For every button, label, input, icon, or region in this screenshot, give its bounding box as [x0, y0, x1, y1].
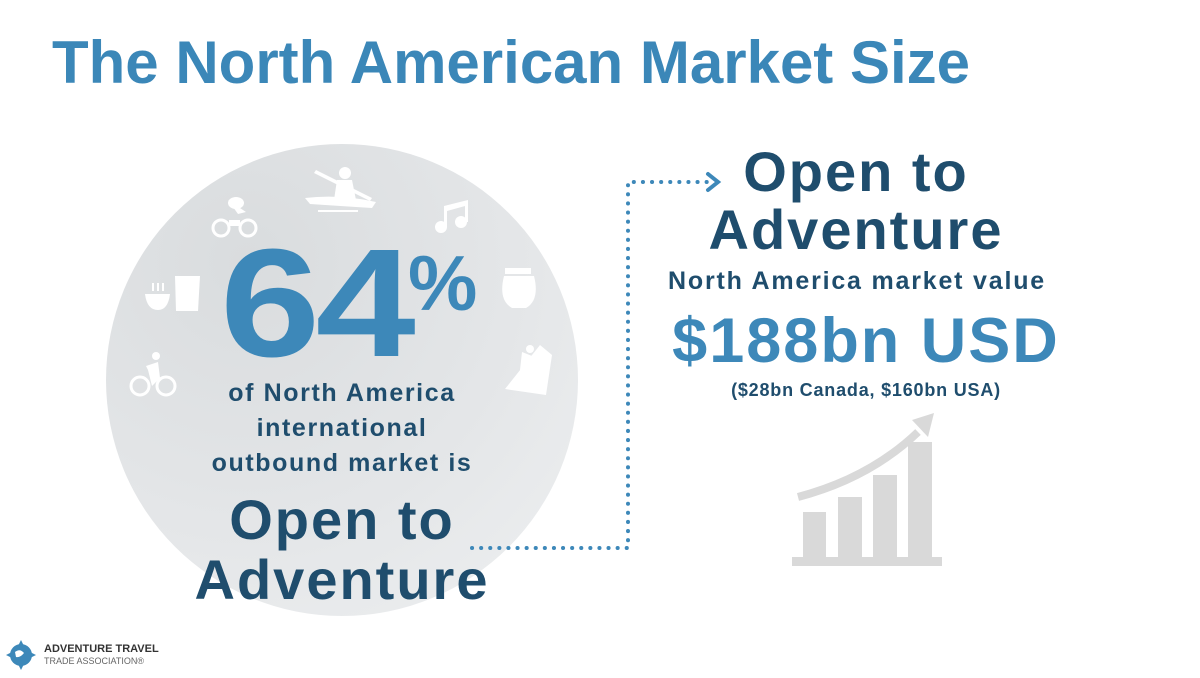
text: open to adventure right: Adventure — [709, 198, 1003, 261]
text: open to adventure left — [195, 488, 489, 611]
panel: circle — [106, 144, 578, 616]
icon: cyclist — [131, 352, 175, 395]
icon: climber — [505, 345, 552, 395]
text: open to adventure left: Open to — [229, 488, 455, 551]
text: market value label: North America market value — [668, 267, 1046, 295]
text: open to adventure left: Adventure — [195, 548, 489, 611]
text: open to adventure right: Open to — [743, 140, 969, 203]
text: circle description: of North America — [228, 379, 456, 407]
text: circle description: international — [257, 414, 427, 442]
icon: bowls — [145, 276, 200, 311]
text: breakdown: ($28bn Canada, $160bn USA) — [731, 380, 1001, 400]
stat: 64%: 64 — [220, 217, 411, 389]
icon: music — [435, 200, 468, 233]
title: The North American Market Size — [52, 29, 970, 96]
stat: $188bn: $188bn USD — [672, 306, 1060, 376]
text: circle description — [212, 379, 472, 477]
logo — [6, 640, 159, 670]
icon: pot — [502, 268, 536, 308]
text: open to adventure right — [709, 140, 1003, 261]
icon: kayak — [305, 167, 376, 212]
logo: TRADE ASSOCIATION® — [44, 656, 144, 666]
icon: growth chart — [792, 413, 942, 566]
text: circle description: outbound market is — [212, 449, 472, 477]
logo: ADVENTURE TRAVEL — [44, 643, 159, 655]
text: % — [408, 239, 477, 327]
icon: bird binoculars — [213, 197, 256, 236]
